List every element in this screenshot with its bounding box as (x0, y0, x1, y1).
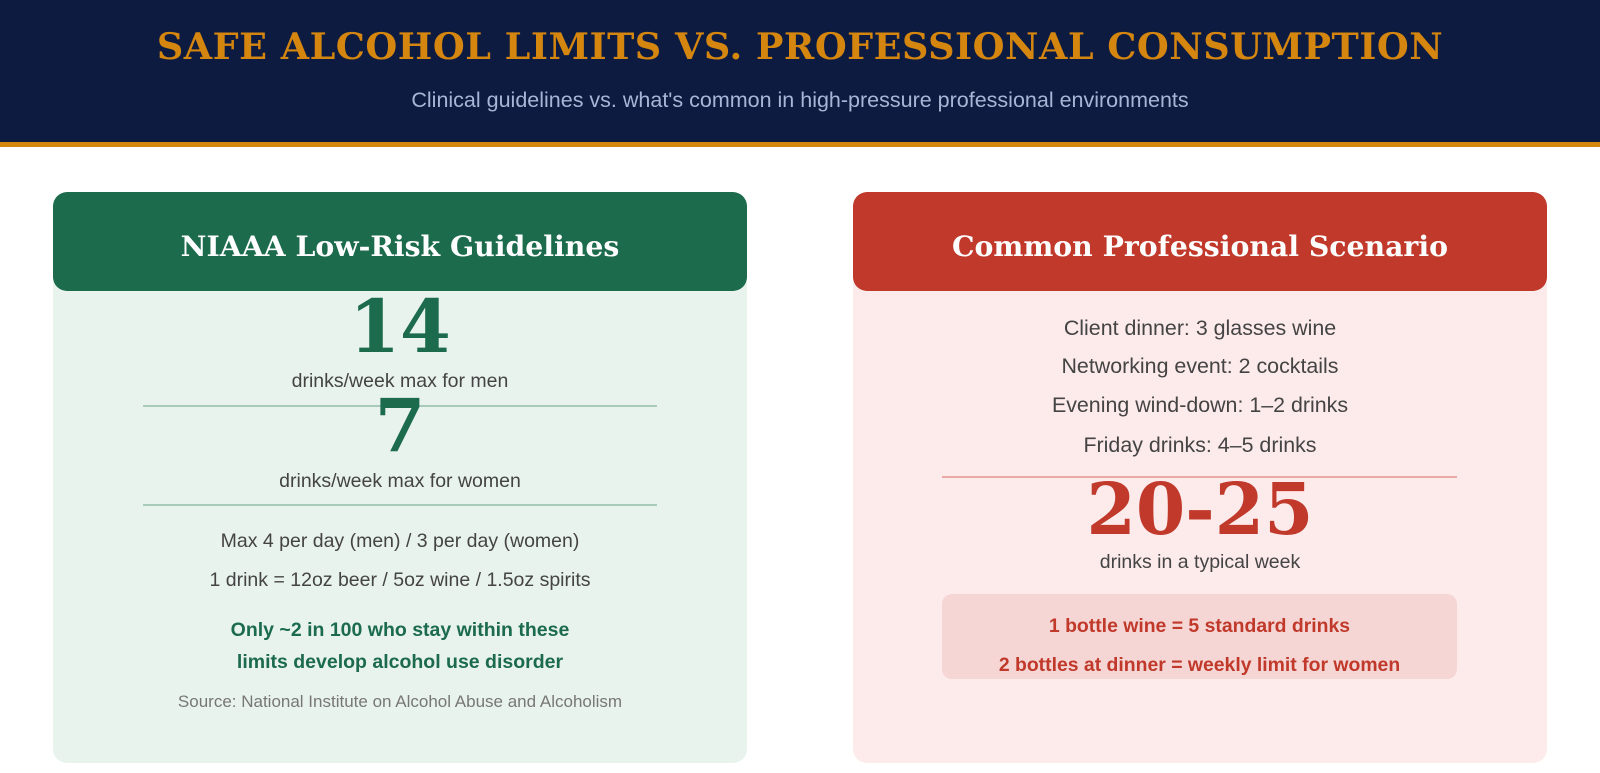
panel header (853, 192, 1547, 291)
stat: 14 men (292, 284, 508, 392)
scenario list: Friday drinks: 4–5 drinks (1083, 433, 1316, 457)
stat: 20-25: drinks in a typical week (1100, 551, 1300, 573)
scenario list (1052, 316, 1348, 457)
title: SAFE ALCOHOL LIMITS VS. PROFESSIONAL CONSUMPTION (157, 25, 1443, 68)
scenario list: Client dinner: 3 glasses wine (1064, 316, 1336, 340)
details (210, 530, 590, 591)
subtitle: Clinical guidelines vs. what's common in high-pressure professional environments (411, 88, 1189, 112)
scenario list: Evening wind-down: 1–2 drinks (1052, 393, 1348, 417)
panel: NIAAA guidelines (53, 192, 747, 763)
callout box: 2 bottles at dinner = weekly limit for women (999, 654, 1400, 676)
panel header (53, 192, 747, 291)
panel: professional scenario (853, 192, 1547, 763)
stat: 7 women (279, 383, 521, 492)
stat: 20-25: 20-25 (1086, 467, 1314, 551)
scenario list: Networking event: 2 cocktails (1061, 354, 1338, 378)
highlight text (231, 619, 569, 673)
highlight text: limits develop alcohol use disorder (237, 651, 563, 673)
panel header: Common Professional Scenario (952, 229, 1448, 263)
stat: 7 women: 7 (375, 383, 425, 469)
stat: 14 men: 14 (349, 284, 451, 370)
callout box (942, 594, 1457, 679)
header banner (0, 0, 1600, 147)
callout box: 1 bottle wine = 5 standard drinks (1049, 615, 1350, 637)
stat: 14 men: drinks/week max for men (292, 370, 508, 392)
highlight text: Only ~2 in 100 who stay within these (231, 619, 569, 641)
details: Max 4 per day (men) / 3 per day (women) (221, 530, 579, 552)
details: 1 drink = 12oz beer / 5oz wine / 1.5oz spirits (210, 569, 590, 591)
stat: 7 women: drinks/week max for women (279, 470, 521, 492)
panel header: NIAAA Low-Risk Guidelines (181, 229, 619, 263)
source: Source: National Institute on Alcohol Abuse and Alcoholism (178, 692, 622, 711)
